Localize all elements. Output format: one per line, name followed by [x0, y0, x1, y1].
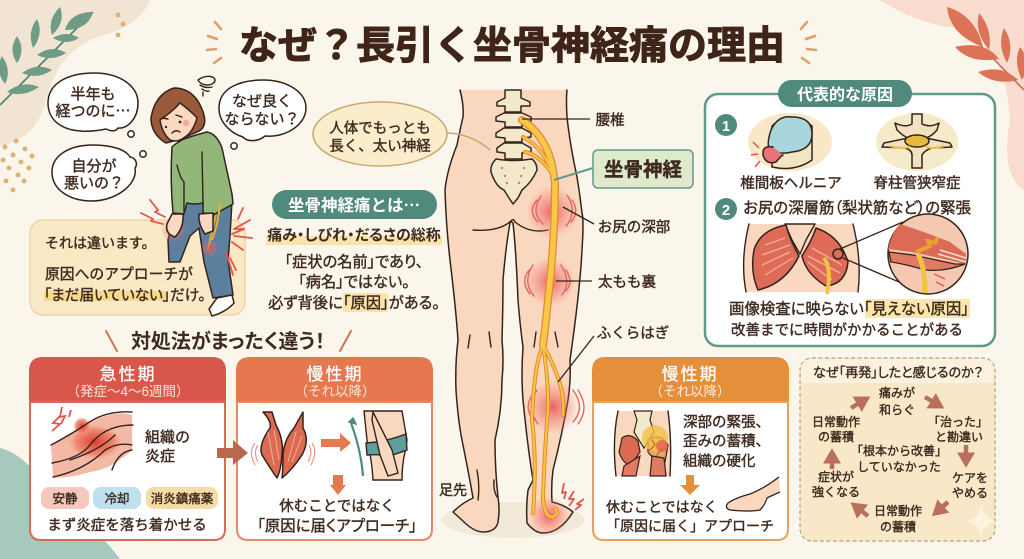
panel: causes — [705, 80, 995, 346]
card: chronic 1: 「原因に届くアプローチ」 — [257, 517, 417, 535]
card: acute: 急性期 — [100, 365, 156, 384]
cycle text: 「根本から改善」 — [851, 443, 947, 458]
lightning marks — [141, 200, 252, 275]
card: chronic 2: 組織の硬化 — [683, 453, 756, 470]
sciatic nerve — [522, 120, 563, 517]
panel: recurrence cycle — [800, 358, 995, 541]
sacrum — [491, 159, 537, 204]
text: definition: 必ず背後に「原因」がある。 — [268, 295, 440, 312]
pill heading: 代表的な原因 — [797, 86, 893, 104]
card: chronic 1: 慢性期 — [306, 364, 364, 384]
label: toes: 足先 — [439, 482, 467, 498]
card: chronic 2: 歪みの蓄積、 — [683, 433, 770, 450]
text: deep gluteal: お尻の深層筋（梨状筋など）の緊張 — [743, 199, 971, 217]
label: lumbar — [522, 112, 624, 129]
foot lightning — [562, 483, 584, 510]
label: lumbar: 腰椎 — [596, 112, 624, 129]
text: approach 2: 休むことではなく — [606, 499, 718, 515]
cycle text: 強くなる — [812, 485, 860, 499]
pill: rest — [41, 487, 89, 509]
text: invisible cause — [729, 299, 970, 339]
label: deep buttock — [563, 207, 670, 236]
badge 2: 2 — [722, 202, 730, 219]
callout: longest nerve: 長く、太い神経 — [329, 138, 431, 155]
decoration: dots — [0, 12, 126, 192]
cycle text: 和らぐ — [879, 403, 915, 417]
background blob: top right — [880, 0, 1024, 190]
icon: spinal stenosis — [876, 113, 958, 171]
pill: anti-inflammatory: 消炎鎮痛薬 — [151, 492, 214, 506]
cycle text: と勘違い — [935, 430, 983, 444]
background blob: bottom left — [0, 448, 120, 559]
bubble: my fault: 悪いの？ — [64, 175, 124, 192]
pain arcs — [525, 195, 584, 424]
pill: cooling: 冷却 — [104, 492, 130, 506]
decoration: title sparks — [207, 22, 816, 63]
arrow: orange down — [680, 475, 700, 495]
arrow: orange down — [330, 475, 346, 495]
bubble: why no better: なぜ良く — [232, 93, 292, 110]
icon: gluteal muscles — [744, 222, 913, 294]
pill: rest: 安静 — [52, 492, 78, 506]
icon: zoom circle — [888, 214, 968, 294]
decoration: sparkle — [966, 505, 996, 537]
bubble: my fault: 自分が — [71, 158, 117, 175]
cycle text: していなかった — [857, 460, 941, 474]
text: invisible cause: 改善までに時間がかかることがある — [731, 322, 963, 339]
sacrum holes — [501, 167, 525, 184]
card: acute: （発症〜4〜6週間） — [66, 384, 190, 399]
icon: dizzy swirl — [198, 76, 215, 96]
label: calf: ふくらはぎ — [597, 325, 669, 342]
shoe — [209, 295, 234, 316]
cycle text — [812, 385, 988, 534]
label: thigh — [556, 274, 656, 291]
label: calf — [558, 325, 669, 382]
card: acute: 炎症 — [145, 448, 175, 465]
text: disc herniation: 椎間板ヘルニア — [740, 175, 842, 192]
cycle text: やめる — [952, 486, 988, 500]
card: acute — [29, 357, 226, 540]
bubble: my fault — [52, 145, 146, 201]
label: deep buttock: お尻の深部 — [598, 219, 670, 236]
pill heading — [778, 80, 912, 107]
trousers — [168, 200, 233, 298]
card: chronic 1: （それ以降） — [294, 384, 376, 399]
callout: not your fault: 原因へのアプローチが — [45, 266, 193, 283]
face — [160, 103, 197, 141]
cycle text: の蓄積 — [880, 519, 916, 534]
spine — [491, 90, 537, 204]
icon: pelvis — [614, 411, 671, 476]
text: stenosis: 脊柱管狭窄症 — [874, 174, 960, 192]
icon: foot — [726, 477, 780, 511]
ground shadow — [442, 502, 584, 538]
text: approach: 休むことではなく — [279, 498, 395, 515]
card: chronic 2: （それ以降） — [650, 384, 730, 399]
badge 1: 1 — [722, 118, 730, 135]
pain glows — [526, 186, 578, 238]
label: thigh: 太もも裏 — [598, 274, 656, 291]
red knee glow — [161, 217, 187, 243]
pill: anti-inflammatory — [146, 487, 218, 509]
cycle text: 日常動作 — [812, 415, 860, 429]
callout: not your fault — [30, 220, 245, 315]
icon: herniated disc — [748, 113, 832, 171]
cycle text: 痛みが — [879, 385, 915, 400]
icon: leg and stretch — [349, 411, 407, 480]
decoration: green leaves — [0, 7, 93, 105]
bubble: half a year: 半年も — [70, 86, 116, 103]
cycle arrows — [832, 397, 966, 516]
heading pill: what is sciatica — [272, 190, 437, 219]
heading pill: what is sciatica: 坐骨神経痛とは… — [288, 192, 420, 216]
title: なぜ？長引く坐骨神経痛の理由 — [239, 25, 785, 68]
label: sciatic nerve: 坐骨神経 — [604, 159, 682, 181]
illustration: woman in pain — [141, 76, 252, 316]
cycle text: 日常動作 — [874, 504, 922, 518]
hair — [151, 88, 205, 143]
badge 1 — [715, 114, 737, 136]
hands — [167, 214, 183, 237]
bubble: why no better: ならない？ — [224, 111, 300, 128]
pill: cooling — [93, 487, 141, 509]
card: chronic 1 — [236, 357, 433, 540]
text: invisible cause: 画像検査に映らない「見えない原因」 — [729, 300, 969, 318]
cycle text: 症状が — [818, 469, 854, 484]
callout: not your fault: それは違います。 — [45, 235, 156, 251]
card: chronic 2: 慢性期 — [662, 364, 718, 384]
legs and torso — [445, 90, 583, 533]
text: deep tension: 深部の緊張、 — [683, 414, 770, 431]
bubble: half a year: 経つのに… — [55, 100, 131, 121]
callout: longest nerve — [313, 102, 490, 166]
heading: different treatment: 対処法がまったく違う！ — [131, 329, 325, 353]
background blob: top left — [0, 0, 150, 146]
body illustration — [442, 90, 584, 538]
decoration: orange leaves — [947, 7, 1024, 90]
cycle text: 「治った」 — [928, 415, 988, 429]
arrow: acute to chronic — [217, 440, 248, 465]
text: definition: 「症状の名前」であり、 — [285, 254, 423, 271]
card: chronic 2: 「原因に届く」アプローチ — [606, 518, 774, 534]
cycle text: ケアを — [952, 471, 988, 485]
cycle text: の蓄積 — [818, 429, 854, 444]
bubble: why no better — [219, 80, 306, 149]
badge 2 — [715, 198, 737, 220]
text: tissue inflammation: 組織の — [145, 429, 190, 446]
callout: longest nerve: 人体でもっとも — [329, 120, 431, 137]
bubble: half a year — [48, 73, 138, 137]
callout: not your fault: 「まだ届いていない」だけ。 — [44, 287, 206, 304]
text: calm inflammation: まず炎症を落ち着かせる — [47, 517, 207, 534]
text: definition — [266, 226, 442, 312]
text: definition: 「病名」ではない。 — [298, 274, 410, 291]
icon: tight muscles — [252, 412, 315, 478]
card: chronic 2 — [592, 357, 789, 540]
panel: recurrence cycle: なぜ「再発」したと感じるのか？ — [813, 365, 983, 380]
icon: inflamed muscle — [51, 407, 133, 478]
text: definition: 痛み・しびれ・だるさの総称 — [267, 226, 441, 244]
arrow: orange right — [321, 433, 351, 452]
label: sciatic nerve — [554, 150, 693, 188]
sweater — [171, 132, 233, 214]
